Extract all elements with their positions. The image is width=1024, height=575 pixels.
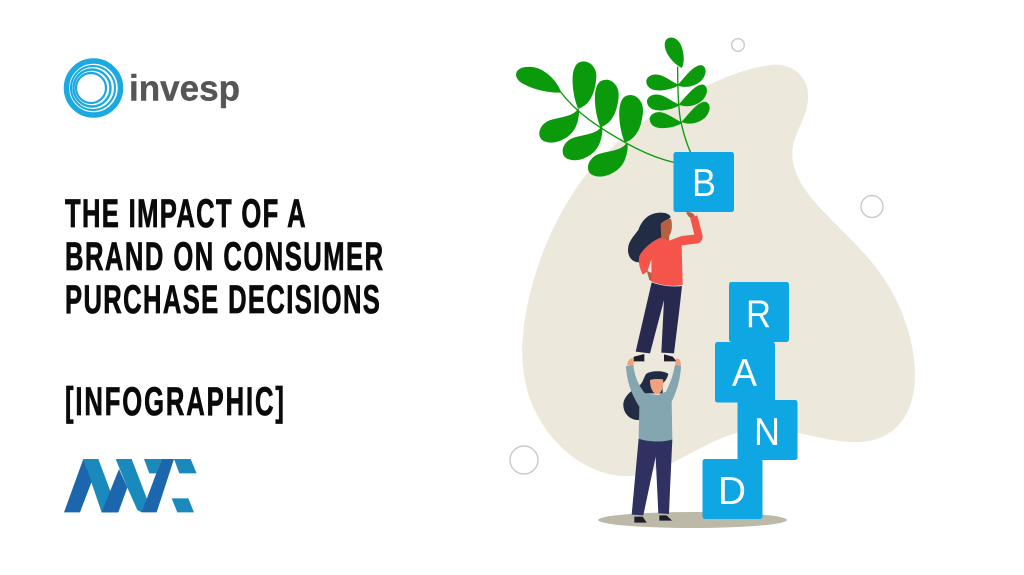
block: A [715,342,775,402]
decorative circles [510,39,883,474]
plant: right branch [647,38,709,153]
logo: MT mark [64,459,197,512]
infographic tag: [INFOGRAPHIC] [65,380,284,425]
figure: bottom woman in blue [623,358,681,523]
title line 3: PURCHASE DECISIONS [65,278,380,323]
block: B: B [692,162,716,205]
title line 2: BRAND ON CONSUMER [65,235,383,280]
ground shadow [598,512,787,528]
figure: top woman in red [628,212,703,361]
icon: concentric blue rings [66,61,120,115]
block: A: A [732,352,757,395]
blocks spelling BRAND [674,152,798,519]
block: R: R [746,293,771,336]
block: N: N [754,411,780,454]
block: N [738,400,798,460]
block: D: D [718,470,746,513]
logo: invesp [66,61,240,115]
block: D [702,459,762,519]
logo wordmark: invesp [129,68,240,108]
block: B [674,152,734,212]
block: R [729,282,789,342]
illustration: beige blob background [522,65,915,476]
title [65,192,383,425]
title line 1: THE IMPACT OF A [65,192,306,237]
plant: left branch [517,62,675,176]
